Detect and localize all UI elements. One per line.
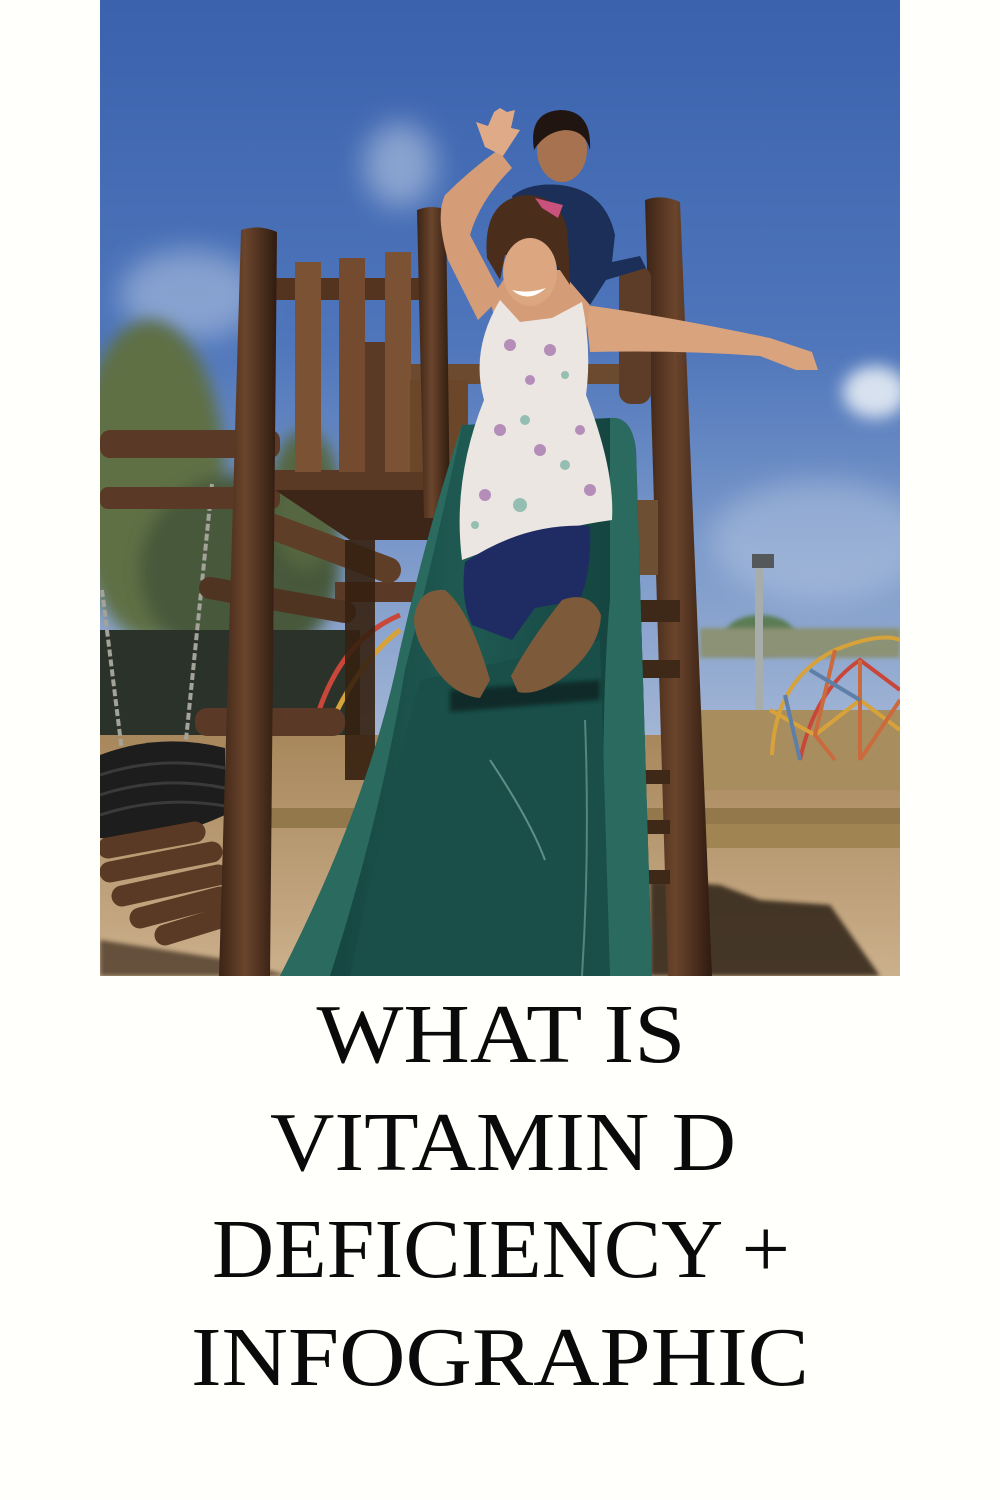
leggings — [464, 526, 590, 640]
sky — [100, 0, 900, 760]
main posts — [219, 227, 277, 976]
boy behind the girl — [512, 110, 646, 305]
title line 2: VITAMIN D — [270, 1096, 736, 1189]
title — [191, 988, 809, 1404]
clouds — [120, 123, 930, 600]
climbing dome — [770, 638, 900, 760]
horizontal logs — [100, 278, 652, 736]
wooden play structure — [100, 197, 712, 976]
raised hand — [476, 108, 520, 156]
swing chains and tyre — [100, 484, 225, 839]
dress — [460, 300, 612, 560]
face — [503, 238, 557, 306]
title line 4: INFOGRAPHIC — [191, 1311, 809, 1404]
title line 1: WHAT IS — [316, 988, 686, 1081]
ground — [100, 735, 900, 976]
hair bow — [535, 198, 563, 218]
right shoe — [511, 597, 601, 693]
log ramp — [108, 832, 220, 935]
slide — [280, 418, 652, 976]
dress pattern — [479, 339, 596, 501]
ground shadows — [650, 880, 880, 976]
photo: girl on playground slide — [75, 0, 930, 976]
hair — [486, 195, 570, 285]
distant trees — [75, 320, 900, 740]
title line 3: DEFICIENCY + — [212, 1203, 790, 1296]
fence boards — [295, 262, 321, 472]
deck — [274, 470, 424, 490]
left shoe — [414, 590, 490, 698]
raised arm — [441, 150, 512, 320]
neck and shoulders — [492, 270, 590, 330]
ladder rungs — [640, 600, 680, 884]
outstretched arm — [585, 305, 818, 370]
girl on the slide — [414, 108, 818, 698]
